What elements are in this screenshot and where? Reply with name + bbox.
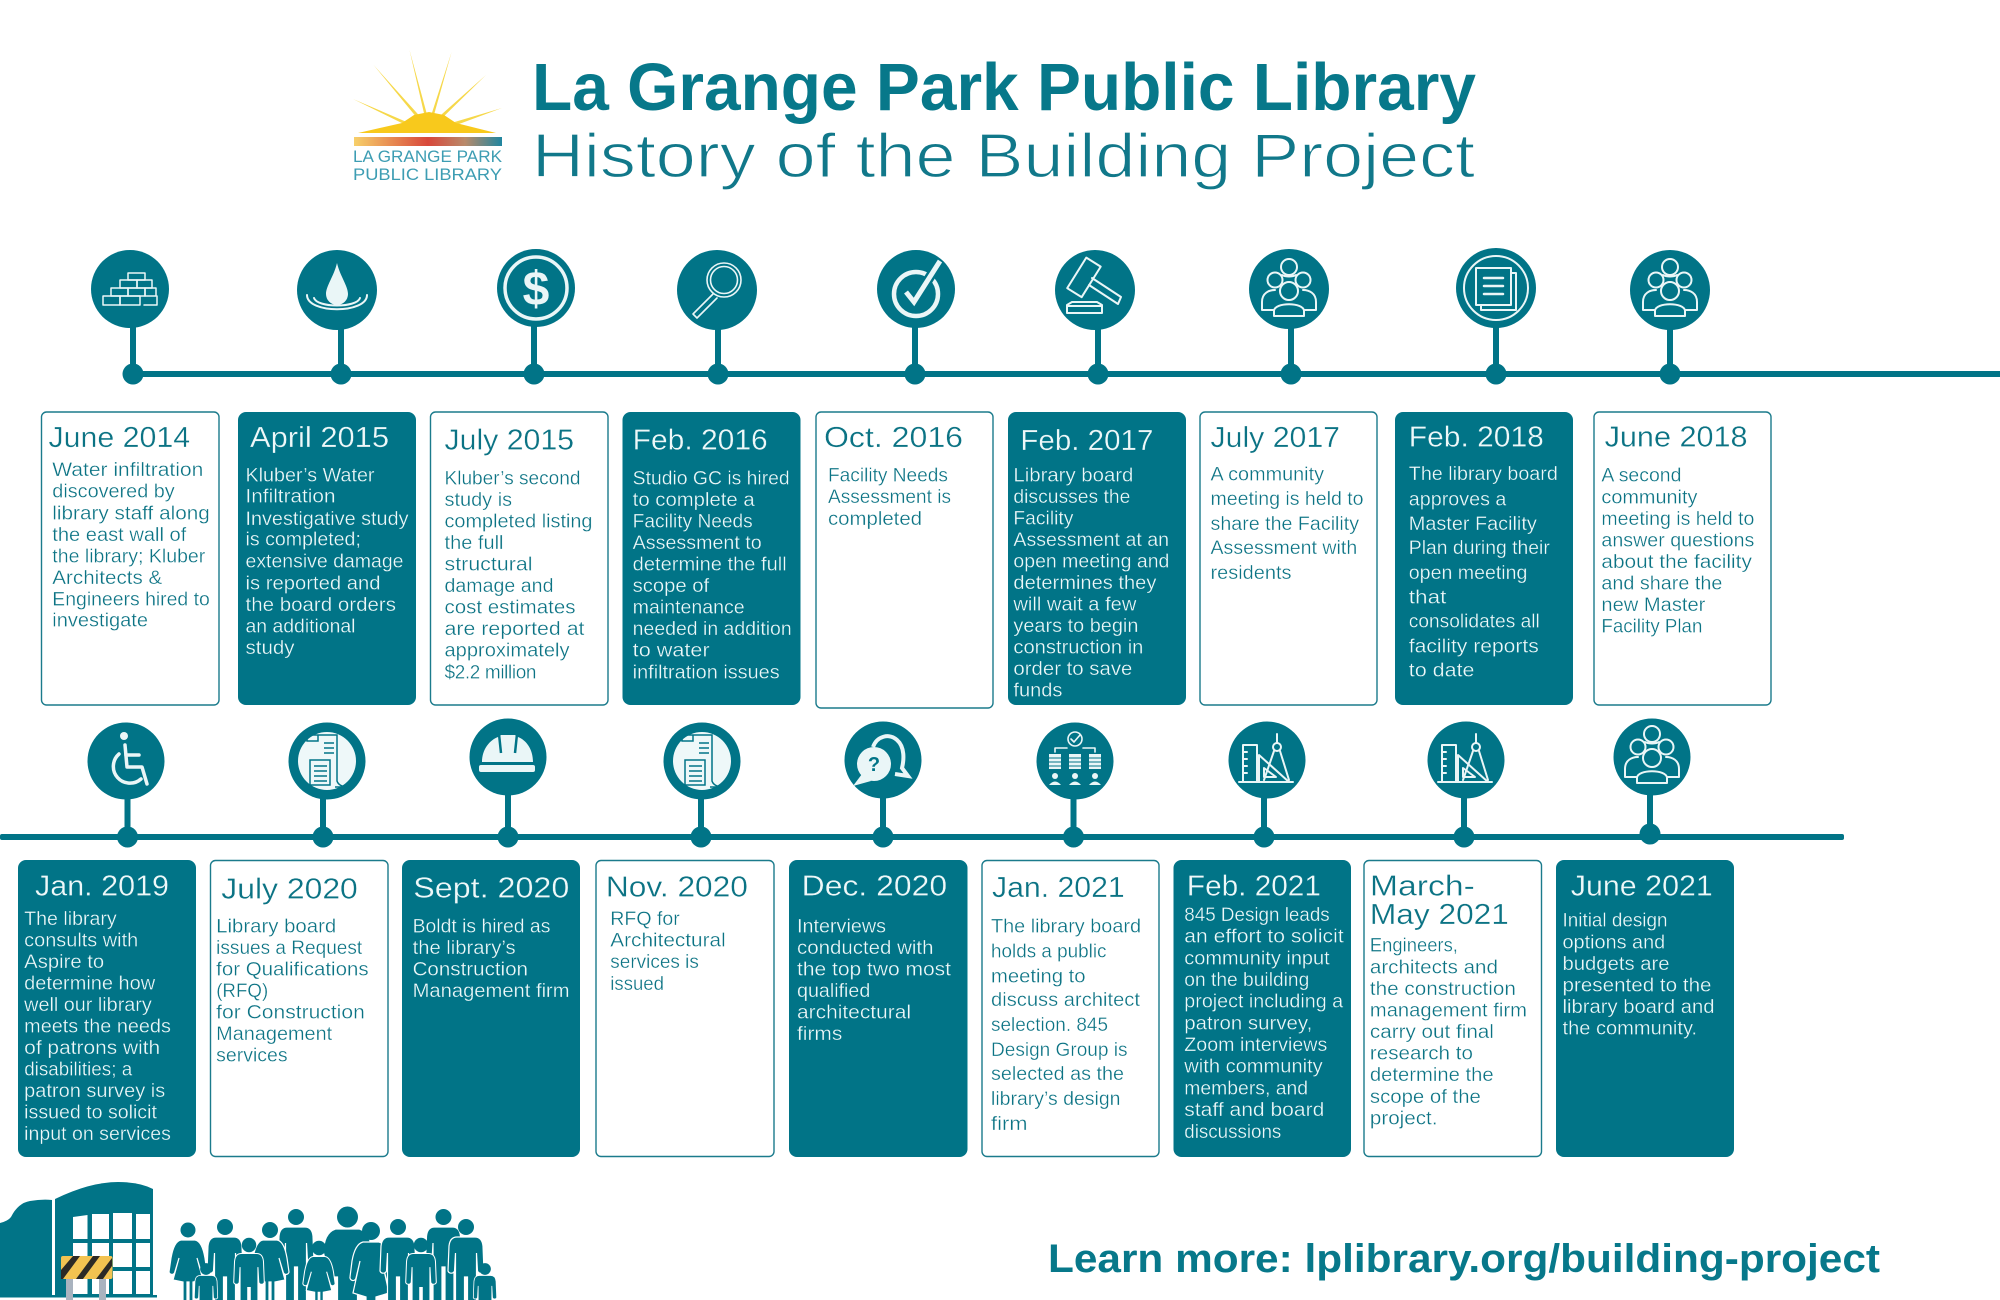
milestone: June 2014 (91, 250, 169, 384)
description (444, 468, 592, 683)
description: The library board (1409, 464, 1558, 485)
description (1210, 465, 1364, 584)
description: is completed; (246, 530, 361, 551)
milestone: Feb. 2016 (677, 250, 757, 384)
description: services is (610, 952, 699, 973)
description: the top two most (797, 959, 952, 980)
description: conducted with (797, 938, 934, 959)
milestone: July 2020 (288, 722, 366, 848)
description: Facility Plan (1601, 617, 1702, 638)
icon: community group (1643, 259, 1697, 316)
description: architectural (797, 1002, 911, 1023)
description (1601, 466, 1754, 638)
card: Feb. 2018 (1395, 412, 1573, 705)
card: July 2020 (210, 860, 388, 1156)
description: options and (1562, 932, 1665, 953)
description: services (216, 1045, 288, 1066)
description: well our library (23, 995, 152, 1016)
date: Jan. 2021 (992, 872, 1125, 904)
description: of patrons with (24, 1038, 160, 1059)
card: Oct. 2016 (816, 412, 993, 708)
description: determine the full (633, 554, 787, 576)
description: meets the needs (24, 1016, 171, 1038)
description: architects and (1370, 957, 1498, 978)
description: Kluber’s Water (246, 466, 375, 487)
date: Oct. 2016 (824, 422, 963, 454)
icon: wheelchair (113, 732, 147, 784)
description: firms (797, 1024, 842, 1045)
date: Feb. 2016 (633, 424, 768, 456)
date: Sept. 2020 (413, 872, 569, 904)
description (23, 909, 171, 1145)
card: July 2017 (1200, 412, 1377, 705)
card: June 2021 (1556, 860, 1734, 1157)
date: July 2020 (221, 873, 358, 905)
description: determines they (1013, 573, 1157, 594)
description: disabilities; a (24, 1060, 133, 1080)
description: Engineers, (1370, 936, 1458, 957)
milestone: July 2017 (1249, 249, 1329, 384)
description: Engineers hired to (52, 590, 210, 611)
description: meeting to (991, 966, 1086, 987)
description (1562, 911, 1714, 1040)
description: firm (991, 1114, 1028, 1135)
description: selected as the (991, 1064, 1124, 1085)
description: facility reports (1409, 637, 1539, 658)
description: open meeting (1409, 563, 1527, 584)
icon: hard hat (479, 734, 535, 772)
date: June 2014 (48, 422, 190, 454)
description: Construction (413, 959, 528, 980)
logo: La Grange Park Public Library (353, 50, 503, 184)
icon: dollar coin: $ (523, 263, 550, 316)
footer link: Learn more: lplibrary.org/building-project (1048, 1237, 1880, 1281)
description: Water infiltration (52, 460, 203, 481)
description: and share the (1601, 574, 1722, 594)
card: April 2015 (238, 412, 416, 705)
description: issues a Request (216, 938, 363, 959)
description: approves a (1409, 490, 1507, 511)
description: Assessment with (1210, 538, 1357, 559)
description: consolidates all (1409, 611, 1540, 632)
description: Architects & (52, 568, 163, 589)
description: the full (444, 533, 504, 554)
description: infiltration issues (633, 662, 780, 683)
description: funds (1013, 681, 1062, 702)
description: the community. (1562, 1019, 1697, 1040)
description: selection. 845 (991, 1015, 1108, 1036)
description: RFQ for (610, 909, 680, 930)
description (610, 909, 726, 995)
description: with community (1183, 1057, 1323, 1078)
description: Zoom interviews (1184, 1035, 1327, 1056)
description: management firm (1370, 1000, 1527, 1022)
description: library staff along (52, 503, 210, 524)
description: A second (1601, 466, 1681, 487)
illustration: library building with barricade (0, 1182, 157, 1300)
description: community (1601, 487, 1698, 508)
description: meeting is held to (1210, 489, 1364, 510)
date: July 2015 (444, 424, 574, 456)
card: Feb. 2021 (1174, 860, 1351, 1157)
description (828, 466, 951, 530)
milestone: June 2021 (1614, 718, 1690, 844)
description: Management (216, 1024, 333, 1045)
description: Master Facility (1409, 514, 1537, 535)
description: Interviews (797, 916, 886, 937)
description: Assessment is (828, 487, 951, 508)
logo: La Grange Park Public Library: LA GRANGE PARK (353, 147, 503, 166)
description: the east wall of (52, 525, 187, 546)
description: community input (1184, 948, 1330, 969)
icon: question bubbles: ? (868, 754, 880, 776)
person: woman center-right (350, 1222, 392, 1300)
description: carry out final (1370, 1022, 1494, 1043)
milestone: Nov. 2020 (664, 722, 740, 848)
card: Sept. 2020 (402, 860, 580, 1157)
card: June 2018 (1594, 412, 1771, 705)
title (532, 50, 1476, 191)
icon: organization chart (1049, 732, 1101, 785)
milestone: July 2015 (497, 249, 575, 384)
description: for Construction (216, 1002, 365, 1023)
description: will wait a few (1012, 595, 1137, 616)
description: Management firm (413, 981, 570, 1002)
description: the library; Kluber (52, 547, 206, 568)
description: Architectural (610, 931, 726, 952)
description: Facility Needs (828, 466, 948, 487)
description: an additional (246, 617, 356, 638)
card: Feb. 2016 (622, 412, 800, 705)
card: Feb. 2017 (1008, 412, 1186, 705)
person: back row man (278, 1209, 314, 1300)
description: Design Group is (991, 1040, 1128, 1061)
description (1012, 466, 1169, 702)
milestone: June 2018 (1630, 250, 1710, 384)
description: the library’s (413, 938, 516, 959)
description: maintenance (633, 598, 745, 619)
person: man right (448, 1219, 484, 1300)
description: damage and (444, 576, 554, 597)
description: staff and board (1184, 1100, 1324, 1121)
description: to water (633, 641, 710, 662)
description: Library board (216, 916, 336, 937)
icon: scroll document (673, 732, 731, 790)
description: new Master (1601, 595, 1706, 616)
date: Feb. 2018 (1409, 422, 1544, 454)
icon: community group (1262, 259, 1316, 316)
description: qualified (797, 981, 870, 1002)
milestone: Dec. 2020 (844, 722, 922, 848)
description: Library board (1013, 466, 1133, 487)
date: Feb. 2017 (1020, 425, 1153, 457)
icon: drafting tools (1239, 734, 1293, 782)
date: April 2015 (250, 422, 389, 454)
icon: community group (1625, 726, 1679, 783)
description: budgets are (1562, 954, 1670, 975)
person: child two (303, 1241, 335, 1300)
description: on the building (1184, 970, 1309, 991)
icon: scroll document (298, 732, 356, 790)
description: years to begin (1013, 616, 1138, 637)
description: about the facility (1601, 552, 1752, 573)
date: Feb. 2021 (1187, 871, 1321, 903)
description: determine the (1370, 1065, 1494, 1086)
icon: documents (1464, 256, 1528, 320)
description: Kluber’s second (444, 468, 580, 489)
description (52, 460, 210, 632)
timeline bar: 2014 to 2018 (133, 371, 2000, 377)
description: cost estimates (444, 598, 576, 619)
card: Nov. 2020 (596, 860, 774, 1156)
description: patron survey is (24, 1081, 165, 1102)
icon: magnifying glass (693, 263, 741, 318)
description: Assessment at an (1013, 530, 1169, 551)
description: library’s design (991, 1089, 1120, 1110)
description: to date (1409, 661, 1474, 682)
description (1370, 936, 1527, 1129)
description: answer questions (1601, 530, 1754, 552)
description: presented to the (1562, 976, 1712, 996)
card: June 2014 (42, 412, 219, 705)
description: Aspire to (24, 952, 104, 973)
description: to complete a (633, 490, 755, 511)
milestone: Feb. 2018 (1456, 248, 1536, 384)
person: child one (234, 1238, 264, 1300)
description: investigate (52, 611, 148, 632)
milestone: Jan. 2021 (1036, 722, 1114, 848)
description: research to (1370, 1044, 1473, 1065)
milestone: Oct. 2016 (877, 250, 955, 384)
person: woman left (169, 1222, 207, 1300)
date: June 2021 (1571, 871, 1713, 903)
description: patron survey, (1184, 1013, 1312, 1034)
logo: La Grange Park Public Library: PUBLIC LIBRARY (353, 165, 502, 184)
icon: check mark (894, 261, 940, 316)
description: Plan during their (1409, 538, 1550, 559)
description: completed (828, 509, 922, 530)
description: study is (444, 490, 512, 511)
card: Jan. 2021 (982, 860, 1159, 1156)
subtitle: History of the Building Project (532, 122, 1475, 191)
person: toddler left (194, 1263, 218, 1300)
illustration: crowd of people (169, 1206, 497, 1300)
title: La Grange Park Public Library (532, 50, 1476, 125)
description: A community (1210, 465, 1325, 486)
date: June 2018 (1605, 422, 1748, 454)
description: project including a (1184, 992, 1344, 1013)
description: order to save (1013, 659, 1132, 680)
description: residents (1210, 563, 1292, 584)
description (1409, 464, 1558, 682)
milestone: April 2015 (297, 250, 377, 384)
timeline bar: 2019 to 2021 (0, 834, 1844, 840)
description: study (246, 638, 295, 659)
description: input on services (24, 1124, 171, 1145)
date: July 2017 (1210, 422, 1340, 454)
description: construction in (1013, 638, 1143, 659)
description: open meeting and (1013, 552, 1169, 573)
description: Initial design (1562, 911, 1668, 932)
description: Infiltration (246, 487, 336, 508)
description: Boldt is hired as (413, 916, 550, 937)
description: approximately (444, 641, 570, 662)
description: 845 Design leads (1184, 905, 1330, 926)
date: March- (1370, 871, 1475, 903)
description: $2.2 million (444, 662, 536, 683)
description: discovered by (52, 482, 175, 503)
person: toddler right (473, 1263, 497, 1300)
milestone: Feb. 2021 (1228, 722, 1306, 848)
milestone: Sept. 2020 (470, 718, 546, 848)
description (633, 468, 792, 683)
description: Assessment to (633, 533, 762, 554)
description: share the Facility (1210, 514, 1360, 535)
description: Investigative study (246, 509, 409, 530)
person: woman center-left (251, 1222, 289, 1300)
description: discussions (1184, 1122, 1281, 1143)
description: extensive damage (246, 552, 404, 573)
icon: drafting tools (1438, 734, 1492, 782)
description: are reported at (444, 619, 585, 640)
description: completed listing (444, 511, 592, 532)
card: March-May 2021 (1364, 860, 1542, 1156)
date: Nov. 2020 (606, 872, 748, 904)
description (246, 466, 409, 659)
icon: water drop (307, 263, 367, 309)
description: structural (444, 554, 532, 576)
description: the construction (1370, 979, 1516, 1000)
description (413, 916, 570, 1002)
milestone: March-May 2021 (1428, 722, 1504, 848)
description: members, and (1184, 1078, 1308, 1099)
description: is reported and (246, 573, 380, 594)
description: discusses the (1013, 487, 1130, 508)
description: the board orders (246, 595, 396, 616)
description: Facility Needs (633, 511, 753, 532)
person: back row man right (426, 1209, 462, 1300)
person: man center-right (380, 1219, 416, 1300)
card: July 2015 (430, 412, 608, 705)
date: May 2021 (1370, 899, 1509, 931)
description: scope of (633, 576, 710, 597)
description: The library (24, 909, 117, 930)
date: Dec. 2020 (802, 871, 947, 903)
description: that (1409, 587, 1447, 608)
description: (RFQ) (216, 981, 268, 1002)
description: issued to solicit (24, 1102, 158, 1124)
description: for Qualifications (216, 959, 369, 980)
description (1183, 905, 1345, 1143)
description: issued (610, 974, 664, 995)
card: Dec. 2020 (789, 860, 968, 1157)
date: Jan. 2019 (35, 871, 169, 903)
person: child three (406, 1238, 436, 1300)
description: discuss architect (991, 990, 1141, 1011)
description (797, 916, 952, 1045)
description: project. (1370, 1108, 1438, 1129)
description: needed in addition (633, 619, 792, 640)
icon: gavel (1067, 258, 1121, 313)
card: Jan. 2019 (18, 860, 196, 1157)
description: an effort to solicit (1184, 927, 1345, 948)
milestone: Jan. 2019 (88, 722, 164, 848)
person: large man (324, 1206, 372, 1300)
person: man second (207, 1219, 243, 1300)
description: consults with (24, 930, 138, 952)
description: holds a public (991, 941, 1106, 962)
date (1370, 871, 1509, 931)
description: library board and (1562, 997, 1714, 1018)
description (216, 916, 369, 1066)
milestone: Feb. 2017 (1055, 250, 1135, 384)
description: Studio GC is hired (633, 468, 790, 489)
description (991, 916, 1141, 1135)
icon: brick wall (103, 273, 157, 305)
description: Facility (1013, 509, 1074, 530)
description: meeting is held to (1601, 509, 1754, 530)
description: scope of the (1370, 1087, 1481, 1108)
description: determine how (24, 974, 155, 994)
description: The library board (991, 916, 1141, 937)
